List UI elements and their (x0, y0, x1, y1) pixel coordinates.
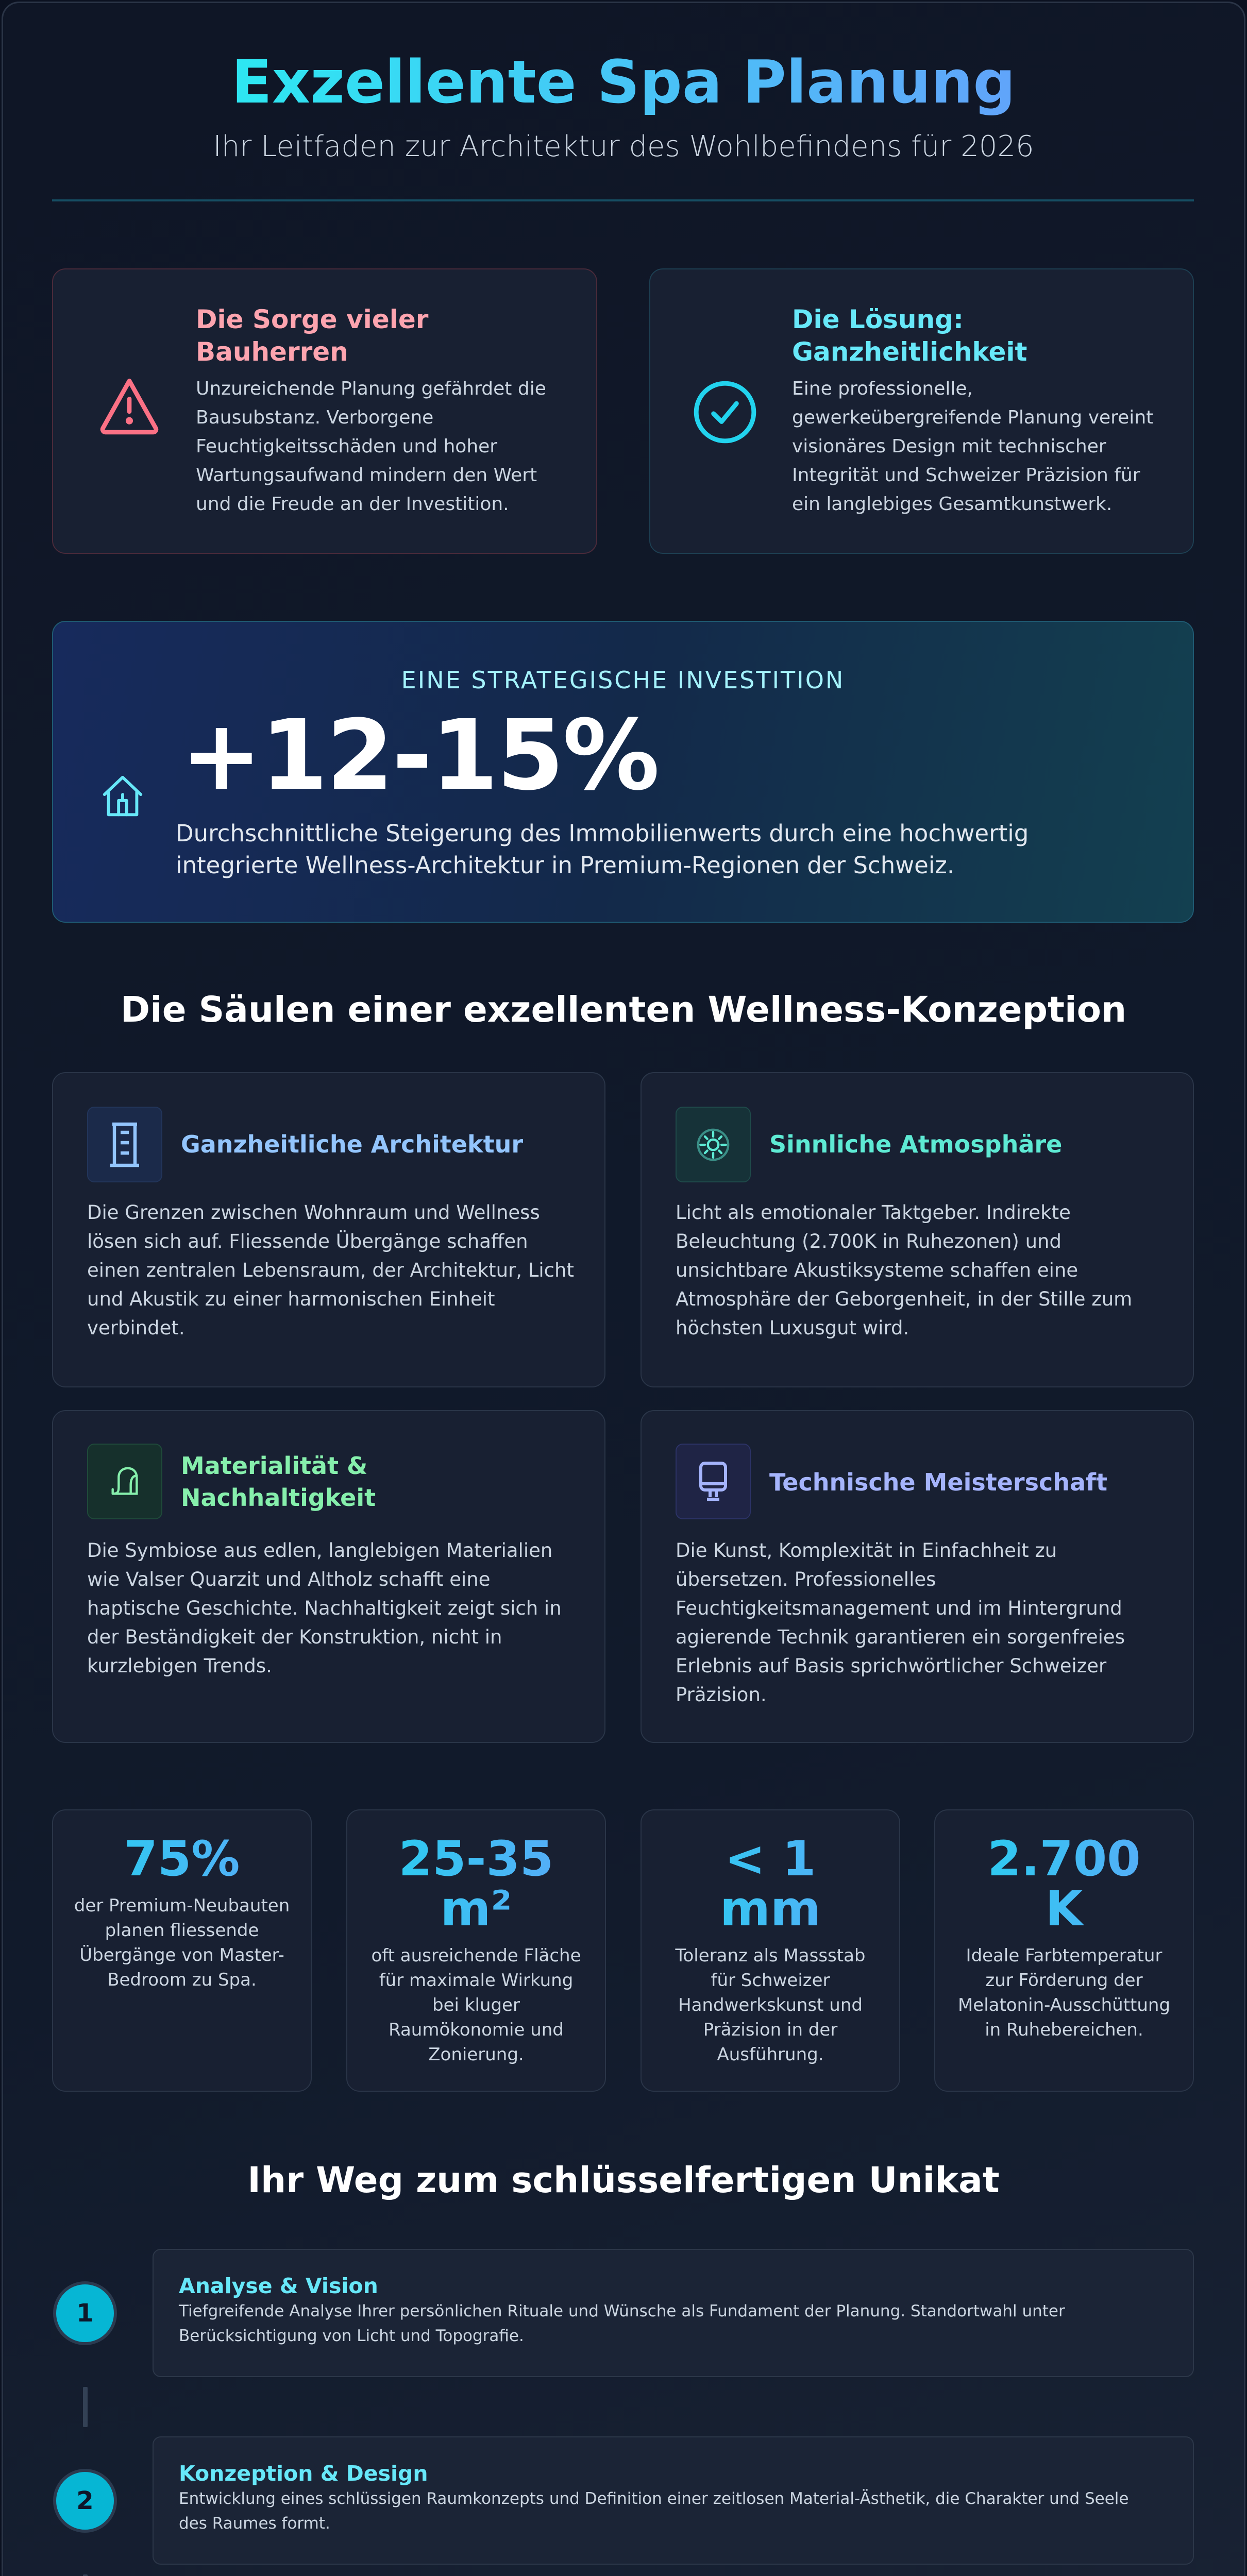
body: einen zentralen Lebensraum, der Architektur, Licht (87, 1259, 574, 1281)
body: der Beständigkeit der Konstruktion, nicht in (87, 1626, 502, 1648)
title: Ganzheitliche Architektur (181, 1130, 523, 1158)
panel: solution (649, 268, 1194, 554)
solution text: Ganzheitlichkeit (792, 337, 1027, 367)
problem text: Unzureichende Planung gefährdet die (196, 378, 546, 399)
big number: +12-15% (181, 699, 658, 812)
stat: 75%: planen fliessende (105, 1920, 259, 1941)
icon: sun (676, 1107, 751, 1182)
stat: tolerance: Handwerkskunst und (678, 1995, 863, 2015)
step 2 circle: 2 (76, 2486, 94, 2515)
stat: area: 25-35 (399, 1831, 553, 1887)
body: verbindet. (87, 1317, 185, 1339)
title: Materialität & (181, 1452, 367, 1480)
body: Die Grenzen zwischen Wohnraum und Wellness (87, 1201, 540, 1224)
title (0, 44, 1247, 121)
panel: materials (52, 1410, 605, 1743)
solution text: Integrität und Schweizer Präzision für (792, 465, 1140, 486)
body (676, 1539, 1125, 1706)
stat: colour temperature: Ideale Farbtemperatur (966, 1945, 1162, 1966)
icon: check circle (694, 381, 756, 443)
step 1: Tiefgreifende Analyse Ihrer persönlichen Rituale und Wünsche als Fundament der Planung. Standortwahl unter (179, 2302, 1065, 2320)
solution text (792, 304, 1153, 515)
stat: colour temperature: K (1046, 1881, 1083, 1937)
step 2 (153, 2436, 1194, 2565)
stat: colour temperature: 2.700 (987, 1831, 1141, 1887)
icon: leaf (87, 1444, 162, 1519)
icon: house (103, 776, 142, 816)
body: wie Valser Quarzit und Altholz schafft eine (87, 1568, 490, 1590)
stat: tolerance: mm (720, 1881, 821, 1937)
stat: tolerance: Präzision in der (703, 2020, 837, 2040)
stat: area: m² (440, 1881, 512, 1937)
body (87, 1201, 574, 1339)
body: Die Symbiose aus edlen, langlebigen Materialien (87, 1539, 552, 1562)
stat: colour temperature: zur Förderung der (985, 1970, 1143, 1991)
problem text: Die Sorge vieler (196, 304, 428, 334)
body: Atmosphäre der Geborgenheit, in der Stille zum (676, 1288, 1132, 1310)
stat: area: bei kluger (432, 1995, 520, 2015)
solution text: visionäres Design mit technischer (792, 436, 1106, 457)
subtitle: Ihr Leitfaden zur Architektur des Wohlbefindens für 2026 (213, 130, 1034, 163)
description: Durchschnittliche Steigerung des Immobilienwerts durch eine hochwertig (176, 820, 1029, 847)
stat: colour temperature: Melatonin-Ausschüttung (958, 1995, 1170, 2015)
step 1: Berücksichtigung von Licht und Topografie. (179, 2327, 524, 2345)
body: Die Kunst, Komplexität in Einfachheit zu (676, 1539, 1057, 1562)
stat: 75%: Übergänge von Master- (79, 1945, 284, 1965)
problem text: Bausubstanz. Verborgene (196, 407, 433, 428)
body (676, 1201, 1132, 1339)
step 1 circle (53, 2281, 117, 2345)
body: Präzision. (676, 1684, 767, 1706)
solution text: gewerkeübergreifende Planung vereint (792, 407, 1153, 428)
heading: process: Ihr Weg zum schlüsselfertigen Unikat (247, 2160, 1000, 2201)
body (87, 1539, 562, 1677)
solution text: Die Lösung: (792, 304, 964, 334)
stat: tolerance: für Schweizer (711, 1970, 830, 1991)
problem text: Bauherren (196, 337, 348, 367)
description (176, 820, 1029, 879)
body: Erlebnis auf Basis sprichwörtlicher Schweizer (676, 1655, 1106, 1677)
stat: tolerance (641, 1809, 900, 2092)
step 2: des Raumes formt. (179, 2514, 330, 2533)
step 2 circle (53, 2469, 117, 2533)
icon: monitor (676, 1444, 751, 1519)
title: Nachhaltigkeit (181, 1484, 376, 1512)
icon: warning (100, 378, 159, 435)
step 1 circle: 1 (76, 2299, 94, 2328)
body: übersetzen. Professionelles (676, 1568, 936, 1590)
stat: 75% (52, 1809, 312, 2092)
body: haptische Geschichte. Nachhaltigkeit zeigt sich in (87, 1597, 562, 1619)
title: Exzellente Spa Planung (231, 48, 1016, 117)
panel: technical (641, 1410, 1194, 1743)
body: kurzlebigen Trends. (87, 1655, 272, 1677)
description: integrierte Wellness-Architektur in Premium-Regionen der Schweiz. (176, 852, 954, 879)
panel: problem (52, 268, 597, 554)
problem text: und die Freude an der Investition. (196, 494, 509, 515)
step 1 (153, 2249, 1194, 2377)
stat: colour temperature: in Ruhebereichen. (985, 2020, 1143, 2040)
stat: tolerance: Ausführung. (717, 2044, 824, 2065)
title (181, 1452, 376, 1512)
body: Feuchtigkeitsmanagement und im Hintergrund (676, 1597, 1122, 1619)
stat: area: für maximale Wirkung (379, 1970, 573, 1991)
panel: investment (52, 621, 1194, 923)
body: und Akustik zu einer harmonischen Einheit (87, 1288, 495, 1310)
body: Beleuchtung (2.700K in Ruhezonen) und (676, 1230, 1061, 1252)
stat: 75%: 75% (124, 1831, 240, 1887)
title: Sinnliche Atmosphäre (769, 1130, 1062, 1158)
stat: 75%: der Premium-Neubauten (74, 1895, 290, 1916)
icon: building (87, 1107, 162, 1182)
body: lösen sich auf. Fliessende Übergänge schaffen (87, 1230, 528, 1252)
heading: pillars: Die Säulen einer exzellenten Wellness-Konzeption (121, 989, 1126, 1030)
stat: area: Raumökonomie und (389, 2020, 564, 2040)
panel: atmosphere (641, 1072, 1194, 1387)
stat: area: Zonierung. (428, 2044, 524, 2065)
label: EINE STRATEGISCHE INVESTITION (401, 666, 845, 694)
problem text: Feuchtigkeitsschäden und hoher (196, 436, 497, 457)
body: agierende Technik garantieren ein sorgenfreies (676, 1626, 1125, 1648)
panel: architecture (52, 1072, 605, 1387)
solution text: Eine professionelle, (792, 378, 973, 399)
stat: tolerance: Toleranz als Massstab (675, 1945, 866, 1966)
body: unsichtbare Akustiksysteme schaffen eine (676, 1259, 1078, 1281)
step 2: Entwicklung eines schlüssigen Raumkonzepts und Definition einer zeitlosen Material-Ästhetik, die Charakter und Seele (179, 2489, 1128, 2508)
stat: tolerance: < 1 (725, 1831, 816, 1887)
problem text (196, 304, 546, 515)
body: Licht als emotionaler Taktgeber. Indirekte (676, 1201, 1071, 1224)
stat: colour temperature (934, 1809, 1194, 2092)
stat: area: oft ausreichende Fläche (371, 1945, 581, 1966)
title: Technische Meisterschaft (769, 1468, 1107, 1496)
stat: area (346, 1809, 606, 2092)
step 2: Konzeption & Design (179, 2461, 428, 2486)
body: höchsten Luxusgut wird. (676, 1317, 909, 1339)
stat: 75%: Bedroom zu Spa. (107, 1970, 257, 1990)
solution text: ein langlebiges Gesamtkunstwerk. (792, 494, 1112, 515)
problem text: Wartungsaufwand mindern den Wert (196, 465, 537, 486)
step 1: Analyse & Vision (179, 2274, 378, 2298)
